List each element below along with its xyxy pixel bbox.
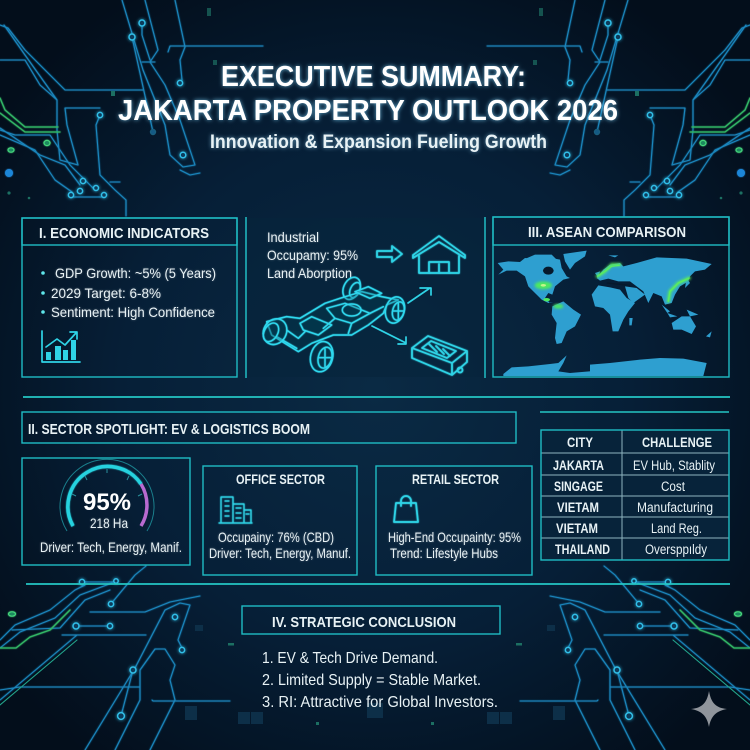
heading: sector spotlight: II. SECTOR SPOTLIGHT: EV & LOGISTICS BOOM (28, 421, 310, 438)
table: ASEAN cities (541, 430, 729, 560)
gauge value: 95% (83, 489, 131, 516)
bullet list: GDP Growth: ~5% (5 Years) (55, 265, 216, 281)
panel: economic indicators (22, 218, 237, 377)
map: Americas (498, 251, 610, 376)
icon: growth chart (42, 331, 80, 362)
panel: ASEAN comparison (493, 217, 729, 377)
icon: battery (412, 336, 467, 375)
title (118, 61, 618, 127)
bullet list: Sentiment: High Confidence (51, 304, 215, 320)
gauge driver text: Driver: Tech, Energy, Manif. (40, 539, 182, 555)
row: Thailand: Oversppıldy (645, 542, 707, 557)
rule under top row (23, 396, 730, 398)
office text: Driver: Tech, Energy, Manuf. (209, 545, 351, 561)
row: Vietam (557, 500, 713, 515)
panel: gauge (22, 458, 190, 565)
divider right (484, 217, 486, 378)
heading: economic indicators: I. ECONOMIC INDICATORS (39, 225, 209, 242)
table header: CITY (567, 435, 593, 450)
row: Singage: SINGAGE (554, 479, 603, 494)
row: Singage (554, 479, 685, 494)
icon: warehouse (413, 236, 465, 273)
row: Thailand (555, 542, 707, 557)
icon: shopping bag (394, 496, 418, 522)
row: Jakarta: JAKARTA (553, 458, 604, 473)
gauge sublabel: 218 Ha (90, 515, 128, 531)
gauge chart (60, 459, 154, 531)
conclusion list: 3. RI: Attractive for Global Investors. (262, 694, 498, 711)
table header (567, 435, 712, 450)
arrow: down right (372, 326, 406, 344)
row: Vietam: Manufacturing (637, 500, 713, 515)
icon: sparkle watermark (691, 691, 727, 727)
map: Eurasia, Africa, Oceania (590, 255, 712, 376)
panel: industrial (248, 218, 484, 377)
icon: office buildings (219, 497, 252, 523)
heading: retail sector: RETAIL SECTOR (412, 471, 499, 487)
rule above conclusion (26, 583, 730, 585)
row: Jakarta (553, 458, 715, 473)
industrial text: Occupamy: 95% (267, 247, 358, 263)
office text: Occupainy: 76% (CBD) (218, 529, 334, 545)
conclusion list: 2. Limited Supply = Stable Market. (262, 672, 481, 689)
panel: retail sector (376, 466, 532, 575)
arrow: up right (408, 288, 431, 303)
row: Vietam land: VIETAM (556, 521, 598, 536)
world map (498, 251, 712, 376)
panel: sector spotlight heading (22, 412, 516, 443)
heading: ASEAN comparison: III. ASEAN COMPARISON (528, 224, 686, 241)
bullet list (41, 265, 216, 320)
bullet list: 2029 Target: 6-8% (51, 285, 161, 301)
retail text: High-End Occupainty: 95% (388, 529, 521, 545)
row: Vietam: VIETAM (557, 500, 599, 515)
title: EXECUTIVE SUMMARY: (221, 61, 526, 93)
retail text: Trend: Lifestyle Hubs (390, 545, 498, 561)
conclusion list (262, 650, 498, 711)
panel: strategic conclusion (242, 606, 500, 634)
industrial text: Industrial (267, 229, 319, 245)
row: Jakarta: EV Hub, Stablity (633, 458, 715, 473)
header block (118, 61, 618, 153)
title: JAKARTA PROPERTY OUTLOOK 2026 (118, 95, 618, 127)
industrial text: Land Aborption (267, 265, 352, 281)
table header: CHALLENGE (642, 435, 712, 450)
arrow: to warehouse (377, 246, 402, 262)
retail text (388, 529, 521, 561)
heading: office sector: OFFICE SECTOR (236, 471, 325, 487)
divider left (245, 217, 247, 378)
table rule (540, 411, 729, 413)
heading: strategic conclusion: IV. STRATEGIC CONCLUSION (272, 614, 456, 631)
icon: EV chassis (259, 274, 407, 374)
panel: office sector (203, 466, 357, 575)
industrial text (267, 229, 358, 281)
circuit traces right (367, 0, 750, 750)
row: Singage: Cost (661, 479, 685, 494)
row: Thailand: THAILAND (555, 542, 610, 557)
office text (209, 529, 351, 561)
conclusion list: 1. EV & Tech Drive Demand. (262, 650, 438, 667)
circuit traces left (0, 0, 383, 750)
subtitle: Innovation & Expansion Fueling Growth (210, 131, 547, 153)
row: Vietam land: Land Reg. (651, 521, 702, 536)
row: Vietam land (556, 521, 702, 536)
